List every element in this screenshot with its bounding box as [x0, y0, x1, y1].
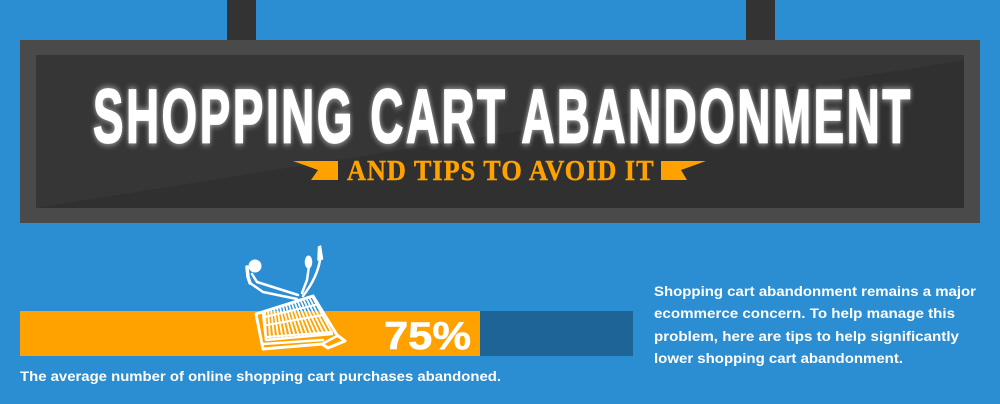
- ribbon subtitle: AND TIPS TO AVOID IT: [347, 155, 654, 186]
- progress bar: 75 percent: [20, 311, 633, 358]
- sign hanger right: [746, 0, 775, 40]
- intro paragraph: ecommerce concern. To help manage this: [654, 305, 955, 321]
- bar caption: The average number of online shopping cart purchases abandoned.: [20, 368, 501, 384]
- title: SHOPPING CART ABANDONMENT: [93, 75, 910, 159]
- panel: hanging sign: [20, 40, 980, 223]
- intro paragraph: lower shopping cart abandonment.: [654, 350, 903, 366]
- progress bar: 75 percent: 75%: [384, 315, 471, 358]
- intro paragraph: problem, here are tips to help significantly: [654, 328, 959, 344]
- intro paragraph: Shopping cart abandonment remains a major: [654, 283, 977, 299]
- icon: tipped shopping cart: [247, 246, 345, 349]
- title: SHOPPING CART ABANDONMENT: [93, 75, 910, 159]
- sign hanger left: [227, 0, 256, 40]
- intro paragraph: [654, 283, 977, 366]
